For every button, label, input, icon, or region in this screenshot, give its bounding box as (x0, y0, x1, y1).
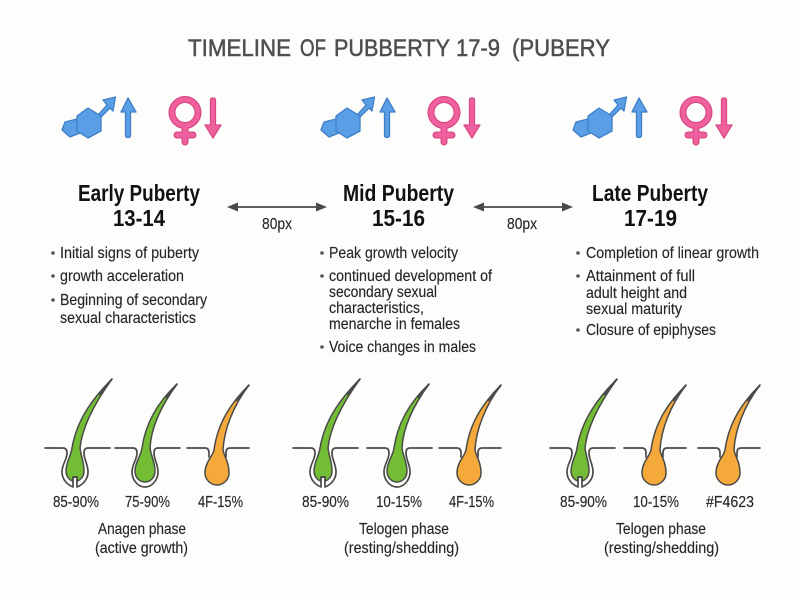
title: TIMELINE (188, 35, 291, 62)
hair group: early: 75-90% (125, 494, 170, 511)
hair group: mid: 85-90% (302, 494, 349, 511)
text block: early bullets: sexual characteristics (60, 310, 196, 327)
caption: telogen, late (604, 521, 719, 557)
hair group: late: 85-90% (560, 494, 607, 511)
text block: mid bullets: Peak growth velocity (329, 245, 458, 262)
caption: anagen: Anagen phase (98, 521, 186, 538)
arrow: mid to late (473, 202, 573, 233)
text block: mid bullets: continued development of (329, 268, 492, 285)
text block: early bullets: growth acceleration (60, 268, 184, 285)
heading: mid puberty: Mid Puberty (343, 180, 454, 206)
hair group: mid: 10-15% (376, 494, 422, 511)
hair group: mid: 4F-15% (449, 494, 494, 511)
text block: mid bullets: Voice changes in males (329, 339, 476, 356)
hair group: mid (293, 379, 501, 511)
text block: late bullets: Attainment of full (586, 268, 695, 285)
text block: late bullets: sexual maturity (586, 301, 682, 318)
icon: estrogen down, late (683, 98, 732, 142)
heading: early puberty: 13-14 (113, 205, 165, 231)
icon: testosterone up, early (62, 97, 136, 138)
heading: mid puberty: 15-16 (372, 205, 425, 231)
title: OF (300, 35, 326, 62)
heading: mid puberty (343, 180, 454, 231)
hair group: late: 10-15% (633, 494, 679, 511)
text block: late bullets: Closure of epiphyses (586, 322, 716, 339)
caption: telogen, late: (resting/shedding) (604, 540, 719, 557)
title: 17-9 (456, 35, 500, 62)
text block: late bullets: adult height and (586, 285, 687, 302)
caption: telogen, mid: Telogen phase (359, 521, 449, 538)
text block: mid bullets: menarche in females (329, 316, 460, 333)
hair group: late (550, 379, 760, 511)
heading: early puberty (78, 180, 200, 231)
text block: mid bullets (320, 245, 492, 356)
text block: early bullets (51, 245, 207, 327)
icon: estrogen down, early (172, 98, 221, 142)
heading: late puberty: Late Puberty (592, 180, 708, 206)
hair group: early (45, 379, 249, 511)
caption: telogen, mid (344, 521, 459, 557)
text block: mid bullets: secondary sexual (329, 284, 437, 301)
hair group: early: 4F-15% (198, 494, 243, 511)
icon: testosterone up, late (573, 97, 647, 138)
hair group: late: #F4623 (706, 494, 754, 511)
text block: late bullets: Completion of linear growth (586, 245, 759, 262)
text block: mid bullets: characteristics, (329, 300, 424, 317)
icon: testosterone up, mid (321, 97, 395, 138)
title (188, 35, 610, 62)
arrow: early to mid: 80px (262, 216, 292, 233)
text block: early bullets: Initial signs of puberty (60, 245, 199, 262)
text block: early bullets: Beginning of secondary (60, 292, 207, 309)
caption: telogen, mid: (resting/shedding) (344, 540, 459, 557)
caption: telogen, late: Telogen phase (616, 521, 706, 538)
hair group: early: 85-90% (53, 494, 99, 511)
heading: late puberty (592, 180, 708, 231)
arrow: mid to late: 80px (507, 216, 537, 233)
title: (PUBERY (512, 35, 610, 62)
heading: late puberty: 17-19 (624, 205, 677, 231)
caption: anagen: (active growth) (95, 540, 188, 557)
icon: estrogen down, mid (431, 98, 480, 142)
heading: early puberty: Early Puberty (78, 180, 200, 206)
text block: late bullets (576, 245, 759, 339)
title: PUBBERTY (334, 35, 450, 62)
arrow: early to mid (227, 202, 327, 233)
caption: anagen (95, 521, 188, 557)
